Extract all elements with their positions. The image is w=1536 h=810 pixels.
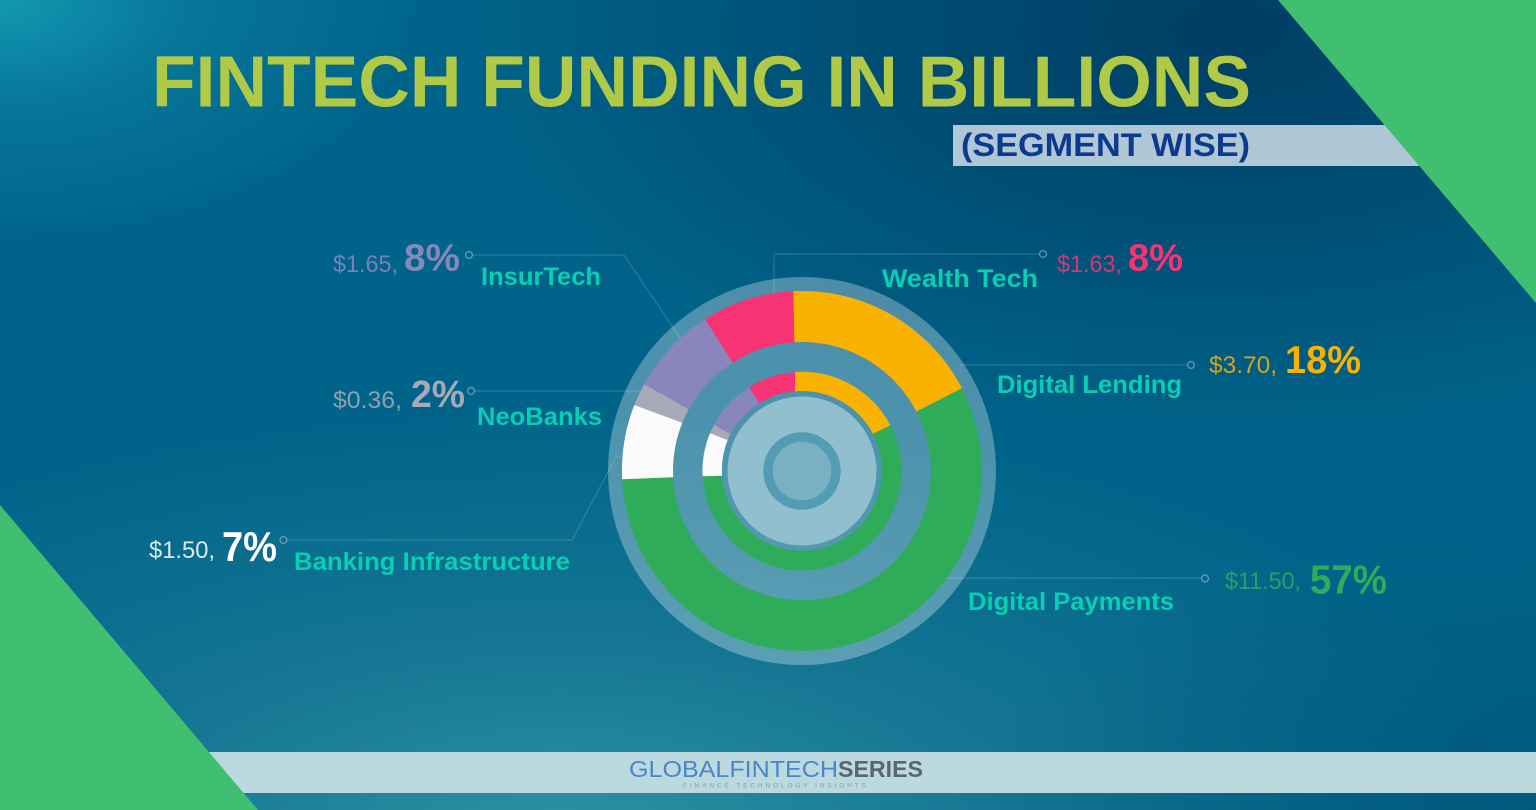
label: Digital Payments (968, 556, 1387, 616)
inner band: insurtech (714, 387, 759, 434)
footer logo: SERIES (838, 756, 923, 782)
label: NeoBanks: NeoBanks (477, 403, 602, 431)
inner band: digital lending (795, 372, 890, 434)
label: Wealth Tech (882, 238, 1183, 293)
inner band: digital payments (703, 425, 901, 570)
label: NeoBanks (333, 374, 602, 431)
inner band: banking infrastructure (702, 433, 728, 476)
outer translucent ring (608, 277, 996, 665)
label: Digital Payments: $11.50, (1225, 568, 1301, 595)
label: Banking Infrastructure: Banking Infrastructure (294, 548, 570, 576)
label: Digital Payments: Digital Payments (968, 588, 1174, 616)
label: Wealth Tech: Wealth Tech (882, 265, 1038, 293)
decorative corner triangle top right (1278, 0, 1536, 303)
label: Digital Lending: Digital Lending (997, 371, 1182, 399)
label: Banking Infrastructure: 7% (222, 523, 277, 570)
label: InsurTech: $1.65, (333, 251, 398, 278)
outer band: digital lending (793, 291, 962, 412)
footer band (205, 752, 1536, 793)
subtitle bar: (SEGMENT WISE) (961, 127, 1250, 163)
outer band: banking infrastructure (622, 405, 682, 479)
label: Digital Lending: 18% (1285, 339, 1361, 382)
outer band: insurtech (644, 319, 733, 409)
label: InsurTech (333, 238, 601, 291)
label: Banking Infrastructure (149, 523, 570, 576)
leader lines (287, 254, 1202, 578)
inner band: neobanks (710, 425, 730, 440)
center ring (768, 437, 836, 505)
footer logo: FINANCE TECHNOLOGY INSIGHTS (683, 782, 867, 790)
label: Digital Lending: $3.70, (1209, 352, 1277, 379)
label: NeoBanks: $0.36, (333, 387, 402, 414)
footer logo (629, 756, 923, 790)
outer band: wealth tech (705, 291, 794, 363)
inner band: wealth tech (749, 372, 795, 403)
label: Digital Lending (997, 339, 1361, 399)
label: Wealth Tech: $1.63, (1057, 251, 1122, 278)
label: Banking Infrastructure: $1.50, (149, 537, 215, 564)
subtitle bar (953, 125, 1433, 166)
outer band: neobanks (634, 384, 689, 423)
label: InsurTech: InsurTech (481, 263, 601, 291)
center disc (728, 396, 876, 546)
label: NeoBanks: 2% (411, 374, 465, 416)
donut chart (608, 277, 996, 665)
label: Wealth Tech: 8% (1128, 238, 1183, 280)
footer logo: GLOBALFINTECH (629, 756, 838, 782)
outer band: digital payments (622, 388, 982, 651)
title: FINTECH FUNDING IN BILLIONS (152, 42, 1251, 122)
decorative corner triangle bottom left (0, 505, 258, 810)
label: Digital Payments: 57% (1310, 556, 1387, 602)
label: InsurTech: 8% (404, 238, 460, 280)
